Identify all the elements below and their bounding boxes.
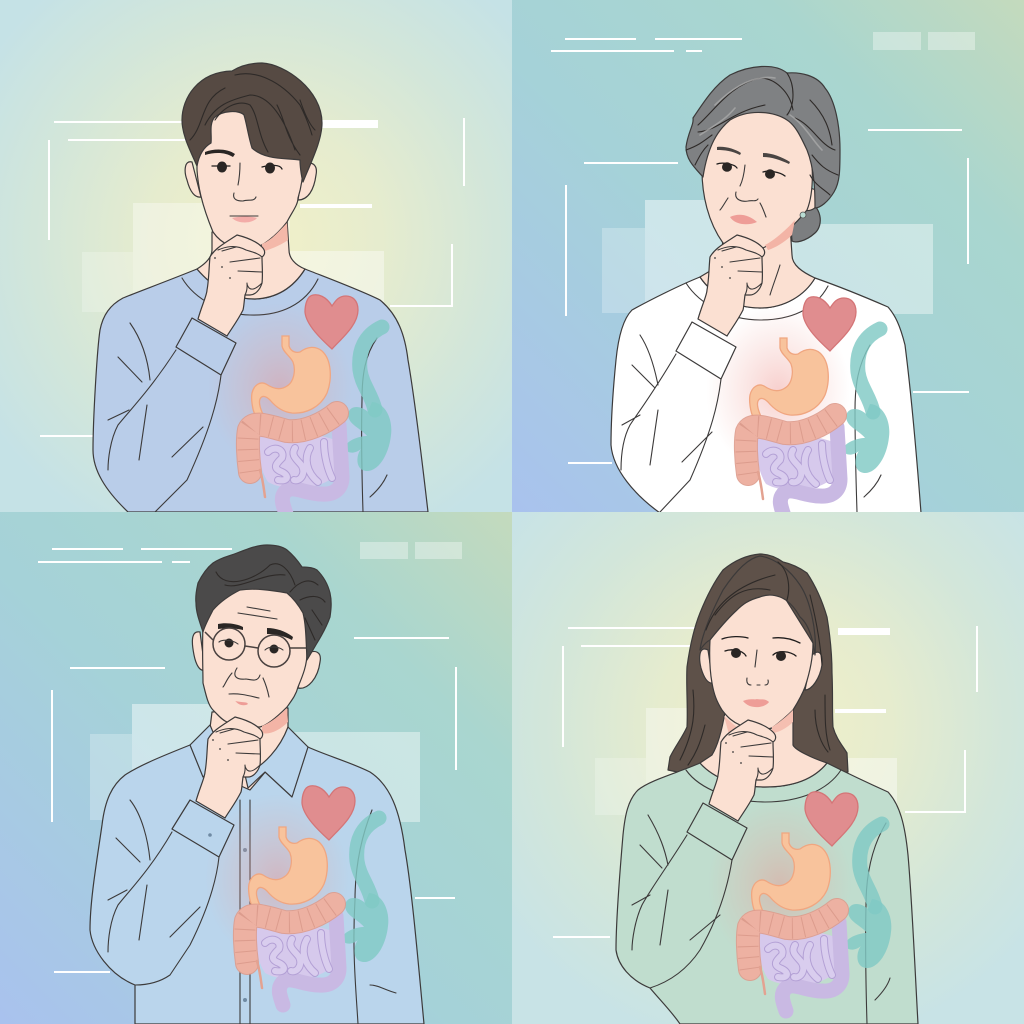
neck: [205, 708, 288, 790]
organs overlay: [205, 786, 388, 1005]
raised hand: [698, 235, 765, 336]
sleeve: [108, 318, 236, 512]
sweater torso: [93, 269, 428, 512]
hair front: [680, 556, 830, 765]
hair: [182, 63, 322, 182]
panel: older man with glasses: [0, 512, 512, 1024]
head: [700, 590, 822, 738]
collar: [190, 725, 308, 797]
organs overlay: [706, 297, 889, 516]
panel: young man: [0, 0, 512, 514]
sweater torso: [616, 763, 918, 1024]
hair back: [668, 554, 848, 790]
organs overlay: [708, 792, 891, 1011]
raised hand: [196, 717, 263, 818]
shirt torso: [90, 745, 424, 1024]
neck: [197, 220, 305, 299]
sleeve: [632, 803, 747, 988]
organs overlay: [208, 295, 391, 514]
hair: [686, 66, 840, 208]
head: [185, 100, 316, 252]
bun and neck: [700, 200, 820, 308]
panel: young woman: [512, 512, 1024, 1024]
background shapes and lines: [553, 626, 977, 937]
hair: [196, 545, 331, 660]
background gradient: [512, 0, 1024, 512]
raised hand: [709, 720, 776, 821]
neck: [700, 705, 827, 787]
head: [702, 113, 815, 250]
background gradient: [0, 512, 512, 1024]
head: [192, 575, 320, 733]
background shapes and lines: [551, 32, 975, 463]
background shapes and lines: [40, 118, 464, 436]
background gradient: [512, 512, 1024, 1024]
background gradient: [0, 0, 512, 512]
background shapes and lines: [38, 542, 462, 972]
sleeve: [108, 800, 234, 985]
sleeve: [621, 322, 736, 512]
sweater torso: [611, 277, 921, 513]
raised hand: [198, 235, 265, 336]
panel: older woman: [512, 0, 1024, 516]
